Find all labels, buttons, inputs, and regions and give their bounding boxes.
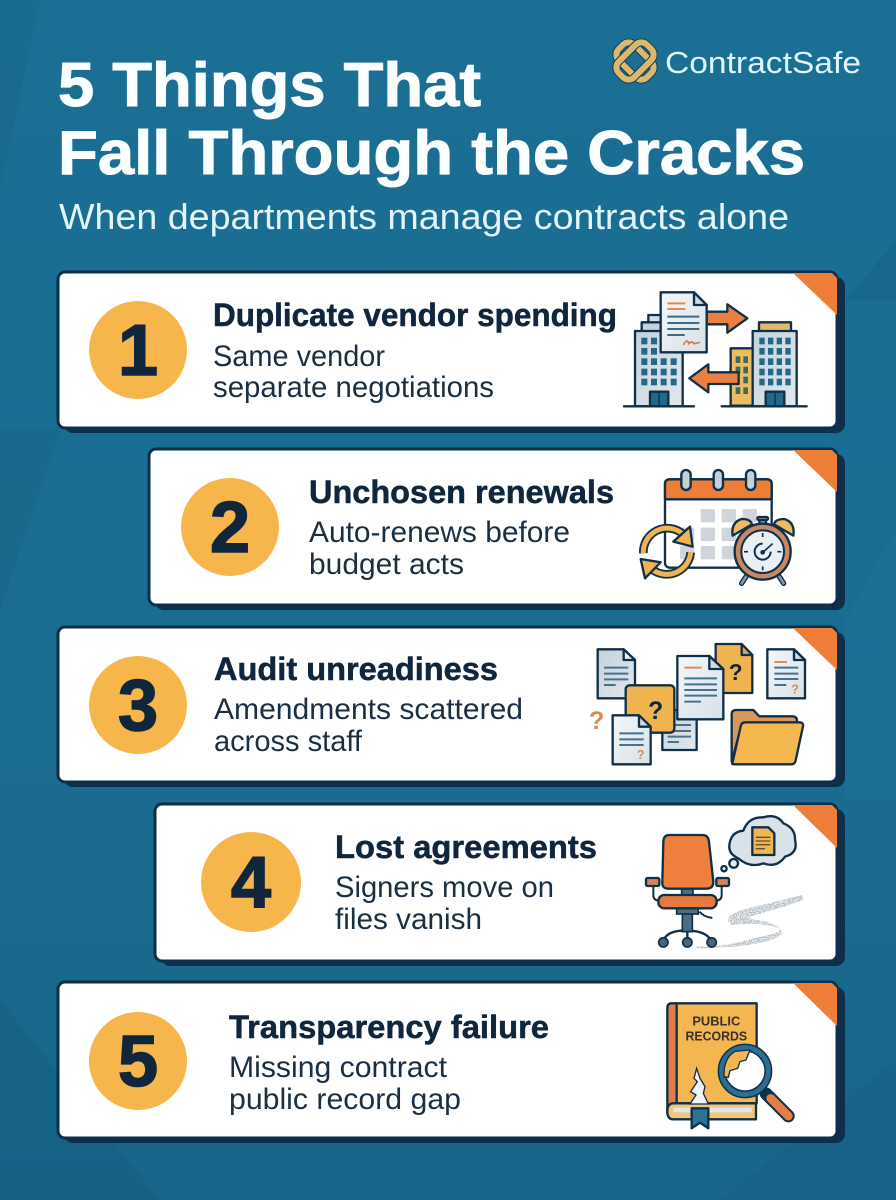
number badge 1: 1 <box>118 311 158 391</box>
icon: torn public records book with magnifier: RECORDS <box>685 1029 747 1043</box>
title: 5 Things That <box>58 51 481 120</box>
panel: card 5 <box>58 982 845 1143</box>
number badge 4 <box>201 832 301 932</box>
title: Fall Through the Cracks <box>58 119 805 188</box>
icon: interlocked knot <box>613 39 657 83</box>
alarm clock <box>742 577 784 583</box>
body text 3: Amendments scattered <box>214 693 523 726</box>
icon: scattered documents and folder: ? <box>729 659 743 685</box>
body text 3: across staff <box>214 725 363 758</box>
icon: buildings exchanging a contract <box>624 292 807 406</box>
body text 3 <box>214 693 523 758</box>
icon: scattered documents and folder: ? <box>589 707 604 735</box>
heading 2: Unchosen renewals <box>309 474 614 510</box>
heading 5: Transparency failure <box>229 1009 549 1045</box>
logo: ContractSafe <box>613 39 861 83</box>
panel: card 3 <box>58 627 845 787</box>
icon: scattered documents and folder: ? <box>648 698 663 725</box>
title <box>58 51 805 188</box>
body text 1: separate negotiations <box>213 371 494 404</box>
body text 4 <box>335 871 554 936</box>
body text 2 <box>309 516 570 581</box>
number badge 3: 3 <box>118 666 158 746</box>
icon: torn public records book with magnifier <box>667 1003 788 1128</box>
icon: scattered documents and folder <box>589 644 805 764</box>
body text 5 <box>229 1051 461 1116</box>
icon: empty office chair with thought bubble <box>646 816 803 948</box>
dust trail <box>697 895 803 948</box>
panel: card 2 <box>149 449 845 610</box>
thought bubble <box>729 816 796 865</box>
panel: card 1 <box>58 272 845 433</box>
icon: scattered documents and folder: ? <box>791 683 799 697</box>
torn crack <box>690 1068 708 1104</box>
number badge 5 <box>89 1012 187 1110</box>
magnifier <box>766 1094 788 1116</box>
heading 3: Audit unreadiness <box>214 651 498 687</box>
body text 1: Same vendor <box>213 340 385 373</box>
number badge 2: 2 <box>210 488 250 568</box>
book label: PUBLIC <box>692 1015 740 1029</box>
heading 4: Lost agreements <box>335 829 597 865</box>
number badge 5: 5 <box>118 1022 158 1102</box>
body text 4: Signers move on <box>335 871 554 904</box>
number badge 2 <box>181 478 279 576</box>
icon: scattered documents and folder: ? <box>637 748 645 762</box>
body text 1 <box>213 340 494 404</box>
heading 1: Duplicate vendor spending <box>213 297 617 333</box>
body text 4: files vanish <box>335 903 482 936</box>
renewal arrows <box>643 528 691 574</box>
body text 2: Auto-renews before <box>309 516 570 549</box>
number badge 1 <box>89 301 187 399</box>
number badge 4: 4 <box>231 843 271 923</box>
wordmark: ContractSafe <box>665 45 861 80</box>
panel: card 4 <box>155 804 845 966</box>
body text 5: Missing contract <box>229 1051 448 1084</box>
body text 2: budget acts <box>309 548 464 581</box>
body text 5: public record gap <box>229 1083 461 1116</box>
number badge 3 <box>89 656 187 754</box>
icon: calendar, renewal arrows and alarm clock <box>641 470 794 583</box>
subtitle: When departments manage contracts alone <box>59 196 789 237</box>
